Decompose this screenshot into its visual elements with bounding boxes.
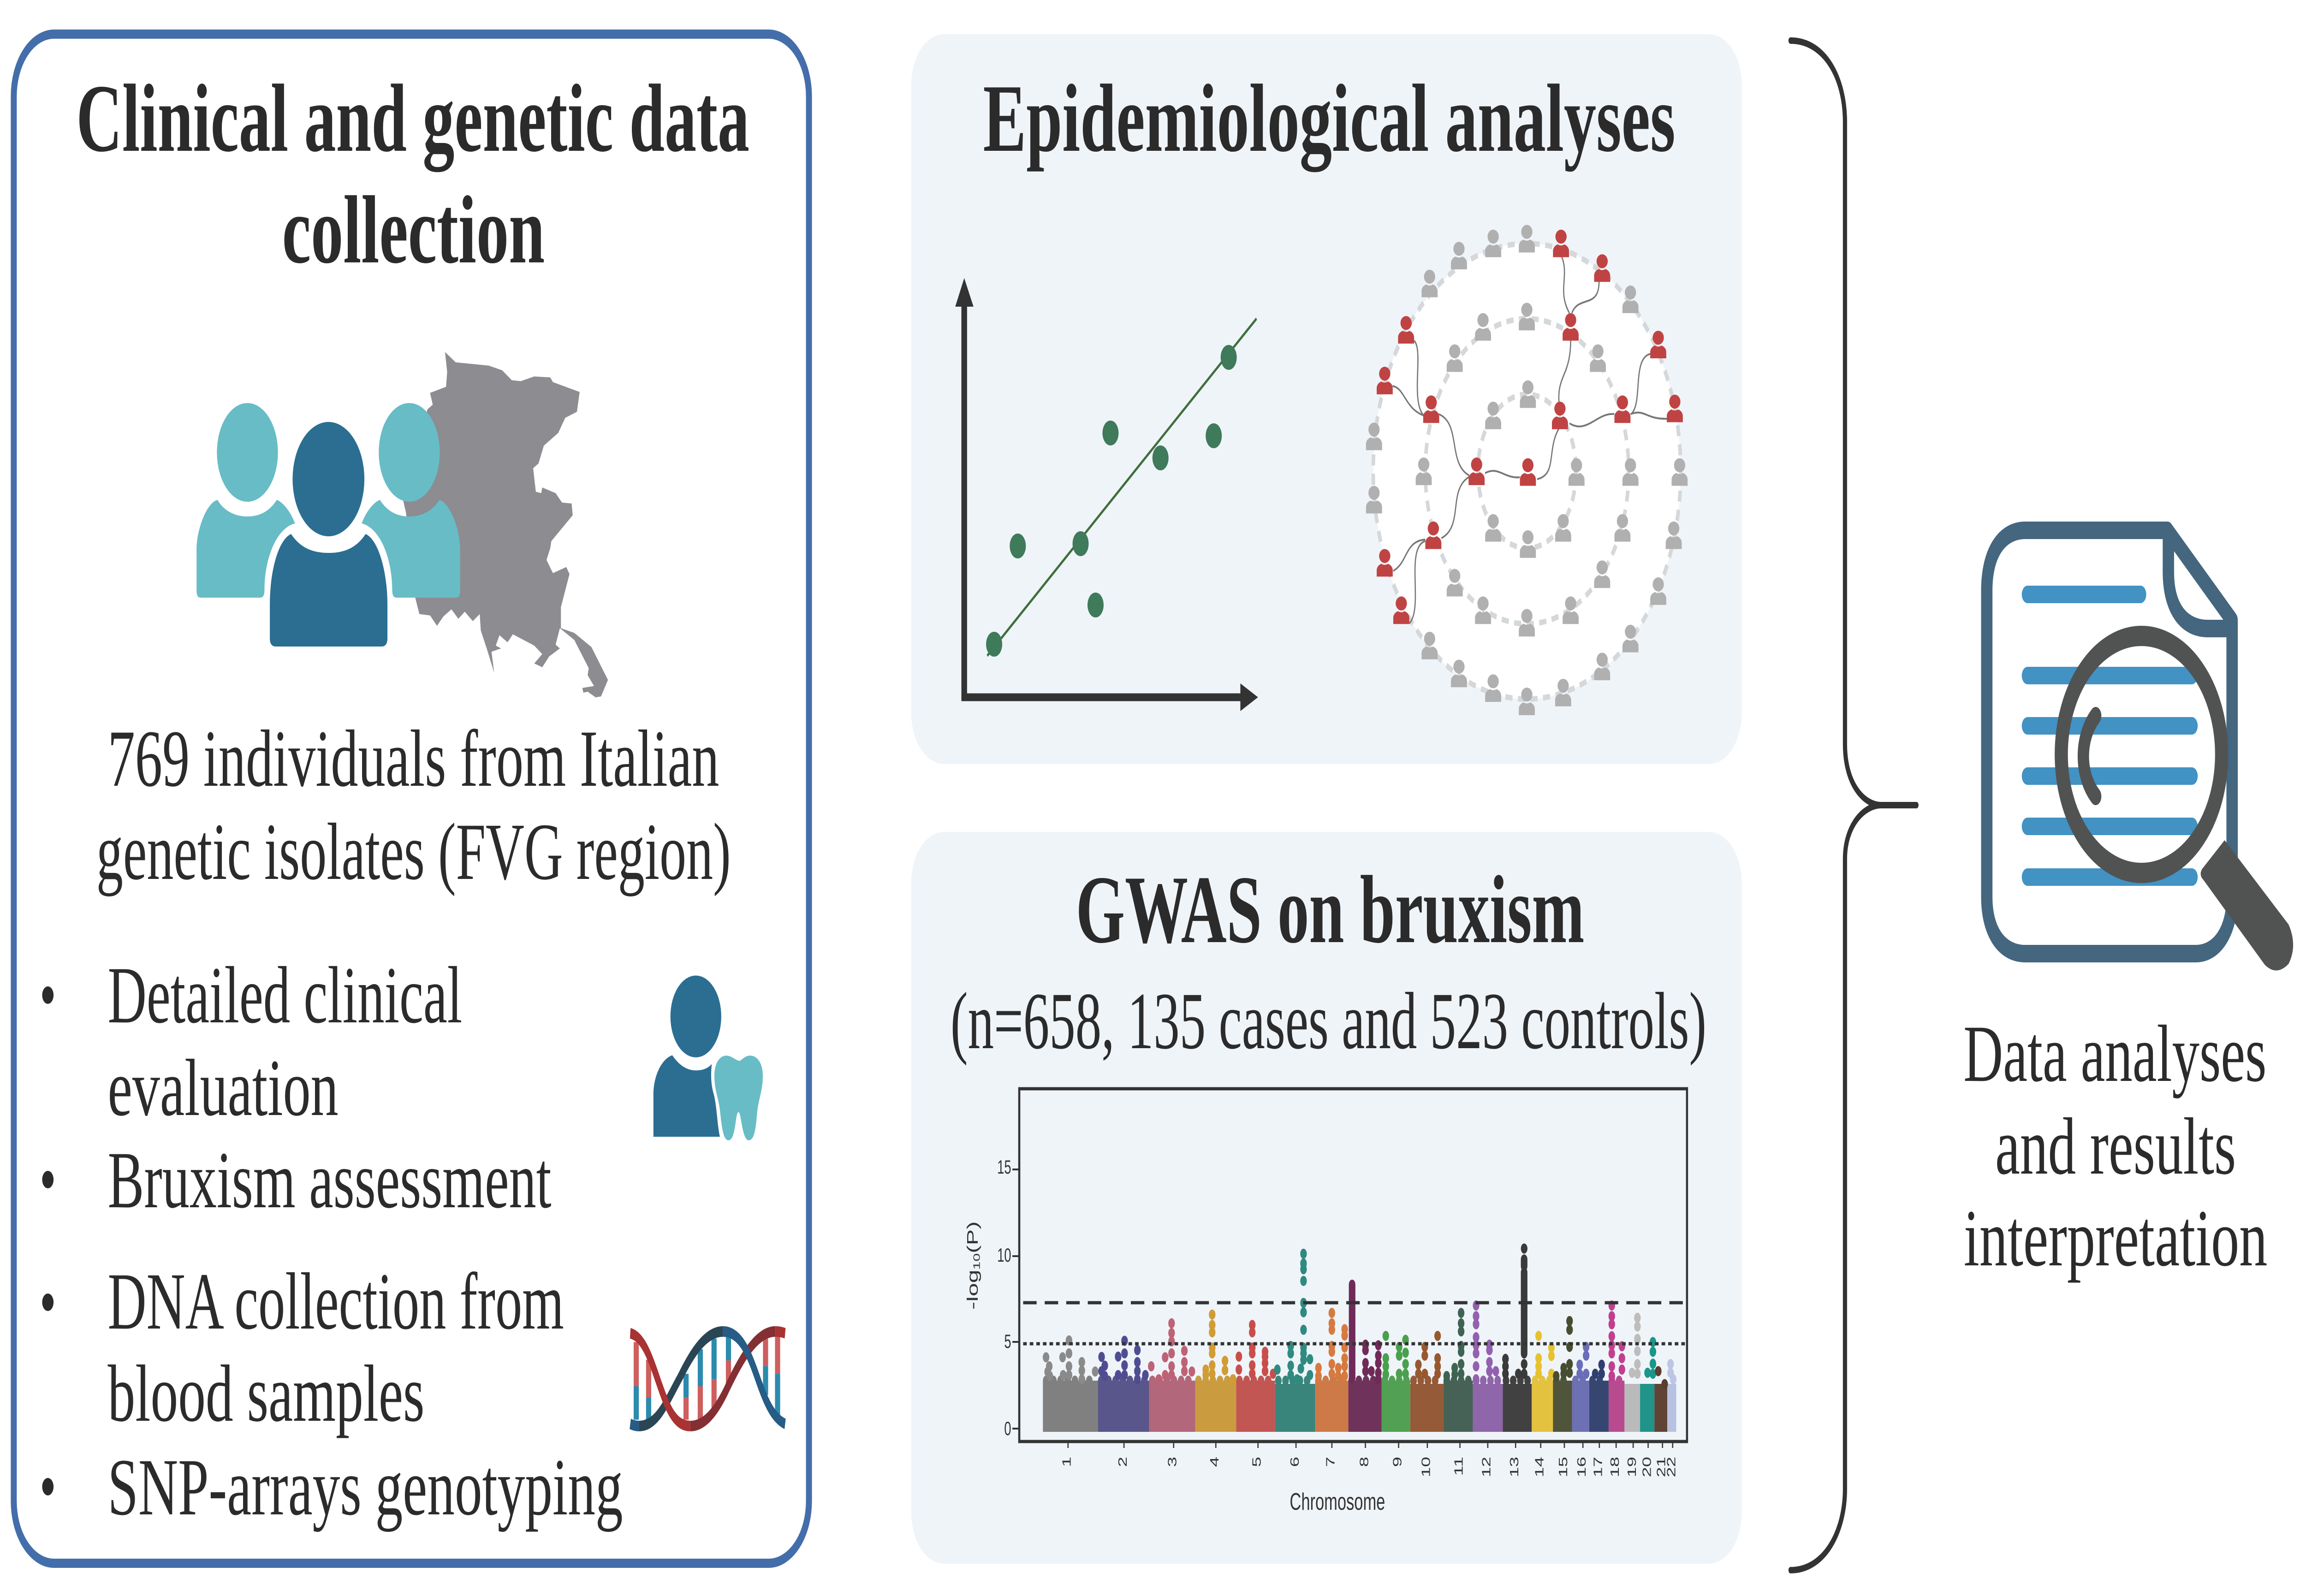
chart: scatter plot with regression line [955,278,1258,711]
y axis labels: -log [964,1270,981,1310]
y axis labels: (P) [964,1221,981,1253]
text: data analyses and results interpretation: Data analyses [1963,1009,2266,1099]
chart: contact network of people [1366,225,1688,715]
association points [1043,1244,1676,1389]
icon: document with magnifying glass [1987,530,2293,971]
y axis labels: 5 [1004,1331,1011,1352]
x axis title: Chromosome [1290,1489,1385,1515]
icon: FVG region map [404,352,608,697]
text: cohort description [96,714,731,897]
icon: person with tooth [654,976,763,1140]
chromosome labels: 21 [1654,1457,1668,1477]
text: data analyses and results interpretation: interpretation [1964,1194,2267,1283]
y axis labels: 15 [997,1157,1011,1178]
chromosome labels: 17 [1592,1457,1605,1477]
bullet list [42,951,623,1532]
text: data analyses and results interpretation: and results [1995,1102,2236,1192]
text: sample size: (n=658, 135 cases and 523 controls) [951,977,1706,1066]
chromosome labels: 8 [1357,1457,1371,1467]
chromosome labels: 11 [1452,1457,1466,1476]
chromosome labels: 4 [1208,1457,1221,1467]
y axis labels: 10 [971,1253,982,1270]
icon: group of people [196,403,460,647]
chromosome labels: 3 [1166,1457,1179,1467]
chromosome labels: 9 [1391,1457,1404,1467]
y axis labels [964,1157,1011,1439]
chromosome labels: 13 [1508,1457,1521,1477]
heading: clinical and genetic data collection: Clinical and genetic data [76,65,749,172]
chromosome labels: 6 [1288,1457,1302,1467]
bullet list: Bruxism assessment [108,1136,552,1225]
chromosome labels: 12 [1480,1457,1493,1477]
chromosome labels [1060,1457,1678,1477]
bullet list: DNA collection from [108,1257,564,1347]
panel: GWAS on bruxism [911,832,1742,1564]
chromosome labels: 20 [1640,1457,1654,1477]
chromosome labels: 22 [1665,1457,1678,1477]
chromosome labels: 14 [1533,1457,1546,1477]
chromosome labels: 7 [1324,1457,1337,1467]
chromosome labels: 10 [1420,1457,1433,1477]
arrow: curly brace joining analyses [1790,41,1916,1570]
chromosome labels: 19 [1625,1457,1639,1477]
chromosome bars [1043,1381,1676,1432]
y axis labels: 10 [997,1245,1011,1266]
chromosome labels: 18 [1608,1457,1622,1477]
heading: epidemiological analyses: Epidemiological analyses [983,65,1676,172]
bullet list: blood samples [108,1349,424,1439]
heading: clinical and genetic data collection: collection [282,177,545,284]
chromosome labels: 15 [1557,1457,1570,1477]
chromosome labels: 16 [1575,1457,1588,1477]
chromosome labels: 1 [1060,1457,1074,1467]
chromosome labels: 2 [1116,1457,1129,1467]
bullet list: SNP-arrays genotyping [108,1443,623,1532]
chromosome labels: 5 [1250,1457,1264,1467]
panel: epidemiological analyses [911,34,1742,764]
bullet list: evaluation [108,1044,339,1133]
text: data analyses and results interpretation [1963,1009,2267,1283]
heading: clinical and genetic data collection [76,65,749,284]
icon: DNA helix [630,1331,785,1426]
text: cohort description: genetic isolates (FVG region) [96,807,731,897]
panel: clinical and genetic data collection [14,34,809,1563]
bullet list: Detailed clinical [108,951,462,1040]
heading: GWAS on bruxism: GWAS on bruxism [1076,856,1584,963]
chart: Manhattan plot [964,1089,1687,1515]
text: cohort description: 769 individuals from Italian [108,714,719,804]
y axis labels: 0 [1004,1418,1011,1439]
